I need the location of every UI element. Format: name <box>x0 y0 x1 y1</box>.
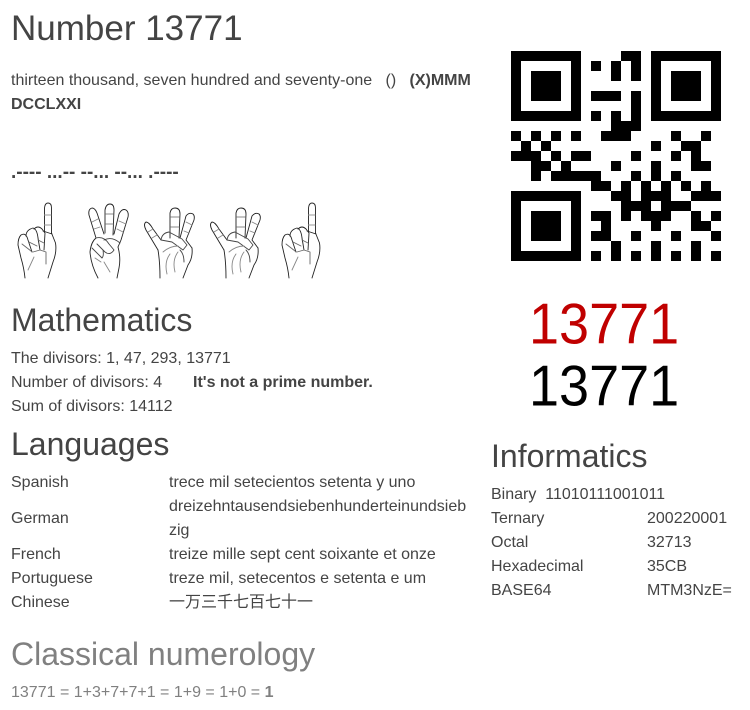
title: Number 13771 <box>11 9 243 48</box>
QR code <box>511 51 721 261</box>
large black number: 13771 <box>529 354 679 418</box>
large red number: 13771 <box>529 292 679 356</box>
morse code: .---- ...-- --... --... .---- <box>11 162 179 183</box>
hand: digit 3 <box>89 204 128 278</box>
languages table: treize mille sept cent soixante et onze <box>169 546 436 563</box>
heading: Classical numerology: Classical numerology <box>11 636 315 672</box>
languages table: dreizehntausendsiebenhunderteinundsieb <box>169 498 466 515</box>
informatics table: Hexadecimal <box>491 558 583 575</box>
languages table: Chinese <box>11 594 70 611</box>
hand: digit 7 second <box>210 208 260 278</box>
informatics table: Ternary <box>491 510 544 527</box>
languages table: French <box>11 546 61 563</box>
informatics table: MTM3NzE= <box>647 582 732 599</box>
heading: Informatics: Informatics <box>491 438 647 474</box>
informatics table: 35CB <box>647 558 687 575</box>
hand: digit 7 first <box>144 208 194 278</box>
informatics table: Binary 11010111001011 <box>491 486 665 503</box>
languages table: Portuguese <box>11 570 93 587</box>
informatics table: BASE64 <box>491 582 551 599</box>
languages table: trece mil setecientos setenta y uno <box>169 474 415 491</box>
number in words and roman numerals: thirteen thousand, seven hundred and seventy-one () (X)MMM <box>11 72 471 89</box>
number in words and roman numerals <box>11 72 471 113</box>
number in words and roman numerals: DCCLXXI <box>11 96 81 113</box>
mathematics facts: Sum of divisors: 14112 <box>11 398 173 415</box>
hand: digit 1 <box>18 203 56 278</box>
languages table <box>11 474 466 611</box>
mathematics facts <box>11 350 373 415</box>
informatics table: 32713 <box>647 534 692 551</box>
informatics table <box>491 486 732 599</box>
hand: digit 1 last <box>282 203 320 278</box>
heading: Mathematics: Mathematics <box>11 302 192 338</box>
informatics table: Octal <box>491 534 528 551</box>
languages table: zig <box>169 522 189 539</box>
languages table: 一万三千七百七十一 <box>169 594 313 611</box>
mathematics facts: It's not a prime number. <box>193 374 373 391</box>
languages table: German <box>11 510 69 527</box>
mathematics facts: Number of divisors: 4 <box>11 374 162 391</box>
mathematics facts: The divisors: 1, 47, 293, 13771 <box>11 350 231 367</box>
heading: Languages: Languages <box>11 426 169 462</box>
languages table: treze mil, setecentos e setenta e um <box>169 570 426 587</box>
numerology sum: 13771 = 1+3+7+7+1 = 1+9 = 1+0 = 1 <box>11 684 273 701</box>
informatics table: 200220001 <box>647 510 727 527</box>
sign language hands <box>18 202 320 278</box>
languages table: Spanish <box>11 474 69 491</box>
